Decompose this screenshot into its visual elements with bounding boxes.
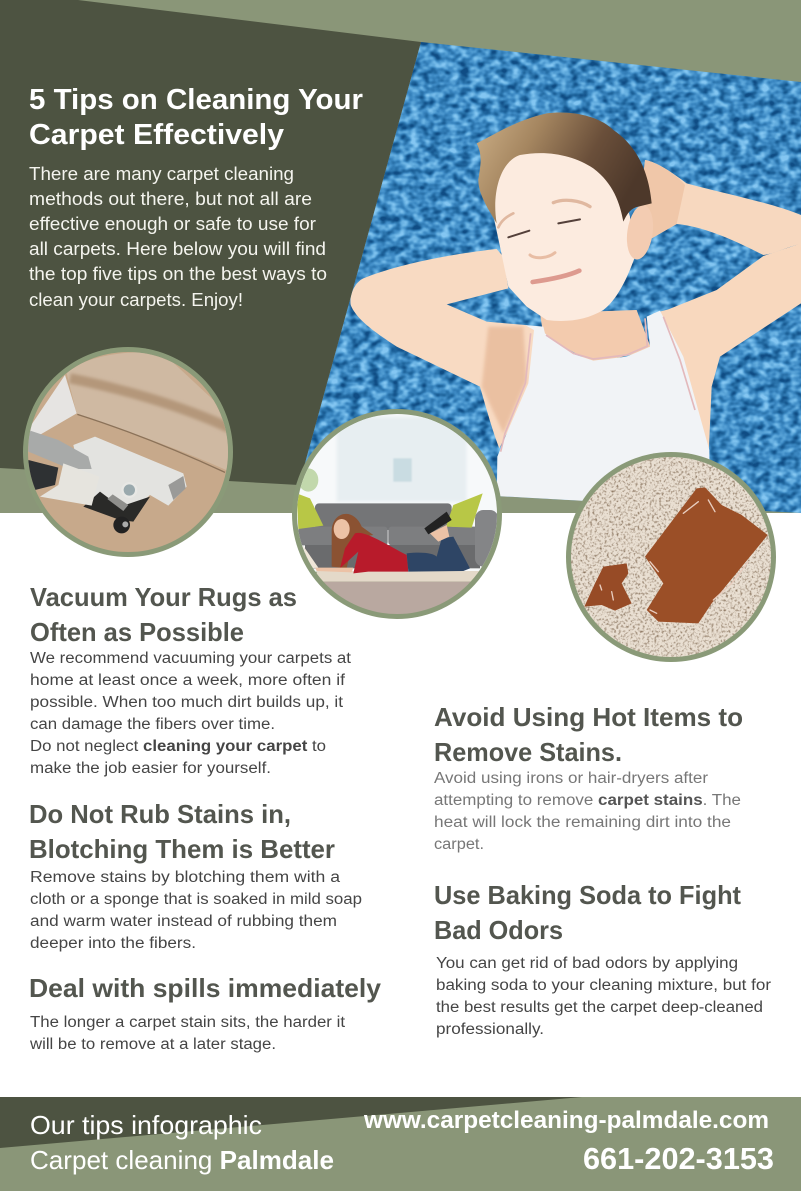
body: and warm water instead of rubbing them xyxy=(30,913,337,930)
circle photo: woman on rug xyxy=(290,405,505,619)
body: You can get rid of bad odors by applying xyxy=(436,955,738,972)
heading: Do Not Rub Stains in, xyxy=(29,799,291,829)
vacuum wheel xyxy=(113,517,130,533)
heading: Vacuum Your Rugs as xyxy=(30,582,297,612)
body xyxy=(30,869,362,952)
vacuum knob xyxy=(121,482,137,498)
circle photo: vacuum on stairs xyxy=(20,345,240,560)
footer left text xyxy=(30,1110,334,1175)
wall xyxy=(27,375,77,434)
body: make the job easier for yourself. xyxy=(30,760,271,777)
circle photo: chocolate stain on carpet xyxy=(565,450,780,665)
intro text xyxy=(29,164,327,310)
right upper arm xyxy=(653,243,801,453)
eyes, brows, nose, mouth xyxy=(498,200,590,282)
hand behind head xyxy=(640,160,685,238)
underarm shading xyxy=(482,327,527,433)
hair xyxy=(477,112,652,223)
tip: do not rub stains xyxy=(29,799,362,952)
intro text: clean your carpets. Enjoy! xyxy=(29,290,243,310)
body: can damage the fibers over time. xyxy=(30,716,275,733)
top sage band xyxy=(0,0,801,513)
tip: vacuum your rugs xyxy=(30,582,352,777)
heading: Bad Odors xyxy=(434,915,563,945)
woman xyxy=(303,512,470,573)
heading xyxy=(434,880,741,945)
footer band xyxy=(0,1097,801,1191)
rug and floor xyxy=(317,571,480,582)
body xyxy=(434,770,741,853)
body: possible. When too much dirt builds up, it xyxy=(30,694,344,711)
dark intro panel xyxy=(0,0,421,485)
heading: Blotching Them is Better xyxy=(29,834,335,864)
body: the best results get the carpet deep-cleaned xyxy=(436,999,763,1016)
plant xyxy=(298,468,318,492)
sofa xyxy=(298,503,498,568)
body: carpet. xyxy=(434,836,484,853)
stair tread xyxy=(67,352,240,473)
body: Do not neglect cleaning your carpet to xyxy=(30,738,326,755)
heading: Deal with spills immediately xyxy=(29,973,382,1003)
body xyxy=(30,650,352,777)
footer left text: Our tips infographic xyxy=(30,1110,262,1140)
vacuum clamp xyxy=(40,463,99,506)
vacuum head xyxy=(73,436,187,506)
heading: Avoid Using Hot Items to xyxy=(434,702,743,732)
body: baking soda to your cleaning mixture, but for xyxy=(436,977,771,994)
ear xyxy=(626,206,653,260)
vacuum end cap xyxy=(168,476,186,500)
intro text: all carpets. Here below you will find xyxy=(29,239,326,259)
footer website: www.carpetcleaning-palmdale.com xyxy=(363,1107,769,1134)
body xyxy=(29,1014,346,1053)
tip: deal with spills xyxy=(29,973,382,1053)
small chocolate stain xyxy=(584,563,632,611)
intro text: effective enough or safe to use for xyxy=(29,214,316,234)
intro text: the top five tips on the best ways to xyxy=(29,264,327,284)
heading xyxy=(434,702,743,767)
intro text: There are many carpet cleaning xyxy=(29,164,294,184)
stair crease xyxy=(77,414,225,472)
body: Remove stains by blotching them with a xyxy=(30,869,340,886)
big chocolate stain xyxy=(645,487,768,623)
tip: baking soda xyxy=(434,880,771,1038)
stain highlights xyxy=(600,500,748,613)
window xyxy=(337,417,467,502)
footer left text: Carpet cleaning Palmdale xyxy=(30,1145,334,1175)
tip: avoid hot items xyxy=(434,702,743,853)
intro text: methods out there, but not all are xyxy=(29,189,312,209)
right forearm and hand xyxy=(645,160,801,255)
pillows xyxy=(297,493,323,529)
white tank top xyxy=(497,311,710,507)
tread shading xyxy=(70,378,230,428)
body: home at least once a week, more often if xyxy=(30,672,346,689)
title: Carpet Effectively xyxy=(29,119,284,151)
face xyxy=(490,143,635,321)
footer phone: 661-202-3153 xyxy=(583,1141,774,1176)
body: will be to remove at a later stage. xyxy=(29,1036,276,1053)
tank top stitching xyxy=(501,317,695,452)
body xyxy=(436,955,771,1038)
vacuum wand xyxy=(28,430,92,469)
body: heat will lock the remaining dirt into the xyxy=(434,814,731,831)
heading: Remove Stains. xyxy=(434,737,622,767)
body: Avoid using irons or hair-dryers after xyxy=(434,770,708,787)
title: 5 Tips on Cleaning Your xyxy=(29,84,363,116)
photo: boy lying on blue carpet xyxy=(290,30,801,520)
body: attempting to remove carpet stains . The xyxy=(434,792,741,809)
boy figure xyxy=(350,112,801,507)
body: We recommend vacuuming your carpets at xyxy=(30,650,352,667)
body: cloth or a sponge that is soaked in mild soap xyxy=(30,891,362,908)
heading xyxy=(30,582,297,647)
vacuum vent xyxy=(107,494,128,511)
heading xyxy=(29,799,335,864)
body: The longer a carpet stain sits, the harder it xyxy=(30,1014,346,1031)
body: professionally. xyxy=(436,1021,544,1038)
neck xyxy=(540,310,652,363)
heading: Often as Possible xyxy=(30,617,244,647)
vacuum dark interior xyxy=(28,460,58,490)
heading: Use Baking Soda to Fight xyxy=(434,880,741,910)
body: deeper into the fibers. xyxy=(30,935,196,952)
blue carpet xyxy=(290,30,801,520)
left arm xyxy=(350,249,540,448)
title xyxy=(29,84,363,151)
vacuum dark base xyxy=(83,492,150,522)
